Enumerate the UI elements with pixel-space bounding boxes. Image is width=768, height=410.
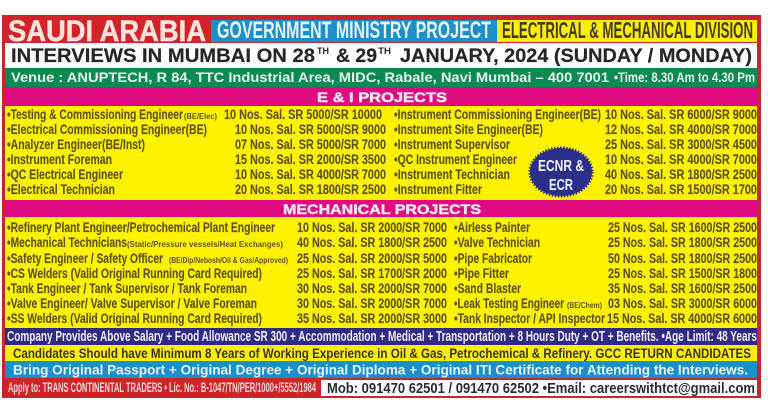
panel: E and I job list [5,106,757,200]
E and I right column [394,107,757,197]
E and I left column: •Electrical Commissioning Engineer(BE) [7,122,207,137]
E and I left column: 20 Nos. Sal. SR 1800/SR 2500 [235,182,386,197]
E and I left column: •Testing & Commissioning Engineer [7,107,184,122]
mechanical right column: •Leak Testing Engineer [454,296,565,311]
title: Saudi Arabia: SAUDI ARABIA [8,15,206,48]
mechanical left column: 30 Nos. Sal. SR 2000/SR 7000 [297,296,447,311]
interview dates banner: TH [317,46,329,56]
E and I right column: •QC Instrument Engineer [394,152,518,167]
heading: government ministry project [211,17,497,44]
mechanical left column: 10 Nos. Sal. SR 2000/SR 7000 [297,220,447,235]
mechanical left column: •CS Welders (Valid Original Running Card Required) [7,266,262,281]
mechanical right column: •Sand Blaster [454,281,522,296]
mechanical left column: (Static/Pressure vessels/Heat Exchanges) [127,240,283,249]
mechanical right column: •Airless Painter [454,220,531,235]
E and I left column: 10 Nos. Sal. SR 5000/SR 9000 [235,122,386,137]
mechanical right column: •Valve Technician [454,235,540,250]
interview dates banner [5,43,757,68]
interview dates banner: & 29 [336,46,377,67]
mechanical left column: •Refinery Plant Engineer/Petrochemical Plant Engineer [7,220,276,235]
mechanical left column: •Safety Engineer / Safety Officer [7,251,164,266]
mechanical left column: •Tank Engineer / Tank Supervisor / Tank Foreman [7,281,247,296]
section heading: mechanical projects: MECHANICAL PROJECTS [283,201,481,217]
mechanical left column: 25 Nos. Sal. SR 2000/SR 5000 [297,251,447,266]
mechanical left column: 40 Nos. Sal. SR 1800/SR 2500 [297,235,447,250]
E and I left column: 07 Nos. Sal. SR 5000/SR 7000 [235,137,386,152]
mechanical left column: 30 Nos. Sal. SR 2000/SR 7000 [297,281,447,296]
venue and time bar: Venue : ANUPTECH, R 84, TTC Industrial Area, MIDC, Rabale, Navi Mumbai – 400 7001 [11,69,609,85]
E and I left column: 15 Nos. Sal. SR 2000/SR 3500 [235,152,386,167]
E and I right column: •Instrument Technician [394,167,510,182]
badge: ECNR and ECR: ECR [549,177,573,194]
heading: government ministry project: GOVERNMENT MINISTRY PROJECT [217,17,491,44]
badge: ECNR and ECR: ECNR & [538,158,584,175]
mechanical left column: 35 Nos. Sal. SR 2000/SR 3000 [297,311,447,326]
mechanical left column: 25 Nos. Sal. SR 1700/SR 2000 [297,266,447,281]
E and I left column: (BE/Elec) [184,112,217,121]
footer: license [5,378,321,396]
E and I left column: 10 Nos. Sal. SR 5000/SR 10000 [224,107,382,122]
E and I left column: 10 Nos. Sal. SR 4000/SR 7000 [235,167,386,182]
mechanical right column [454,220,757,326]
section heading: mechanical projects [5,200,757,217]
mechanical left column [7,220,447,326]
E and I left column: •Electrical Technician [7,182,115,197]
header band [2,15,757,48]
mechanical right column: •Pipe Fabricator [454,251,533,266]
E and I right column: •Instrument Commissioning Engineer(BE) [394,107,601,122]
venue and time bar [5,68,757,87]
section heading: E and I projects: E & I PROJECTS [317,89,447,105]
badge: ECNR and ECR [530,148,592,196]
mechanical right column: •Pipe Fitter [454,266,510,281]
E and I left column [7,107,386,197]
mechanical left column: •Mechanical Technicians [7,235,127,250]
mechanical right column: (BE/Chem) [567,301,602,310]
E and I right column: •Instrument Site Engineer(BE) [394,122,543,137]
E and I left column: •QC Electrical Engineer [7,167,124,182]
mechanical left column: •SS Welders (Valid Original Running Card Required) [7,311,262,326]
mechanical left column: (BE/Dip/Nebosh/Oil & Gas/Approved) [169,256,288,265]
documents bar: Bring Original Passport + Original Degree + Original Diploma + Original ITI Certificate for Attending the Interviews. [13,362,748,378]
interview dates banner: TH [378,46,391,56]
E and I right column: •Instrument Fitter [394,182,483,197]
section heading: E and I projects [5,87,757,105]
E and I right column: •Instrument Supervisor [394,137,511,152]
interview dates banner: INTERVIEWS IN MUMBAI ON 28 [11,46,315,67]
E and I left column: •Analyzer Engineer(BE/Inst) [7,137,145,152]
mechanical left column: •Valve Engineer/ Valve Supervisor / Valve Foreman [7,296,257,311]
panel: mechanical job list [5,217,757,328]
interview dates banner: JANUARY, 2024 (SUNDAY / MONDAY) [400,46,752,67]
mechanical right column: •Tank Inspector / API Inspector [454,311,606,326]
E and I left column: •Instrument Foreman [7,152,112,167]
footer: license: Apply to: TRANS CONTINENTAL TRADERS • Lic. No.: B-1047/TN/PER/1000+/5552/1984 [8,380,316,395]
